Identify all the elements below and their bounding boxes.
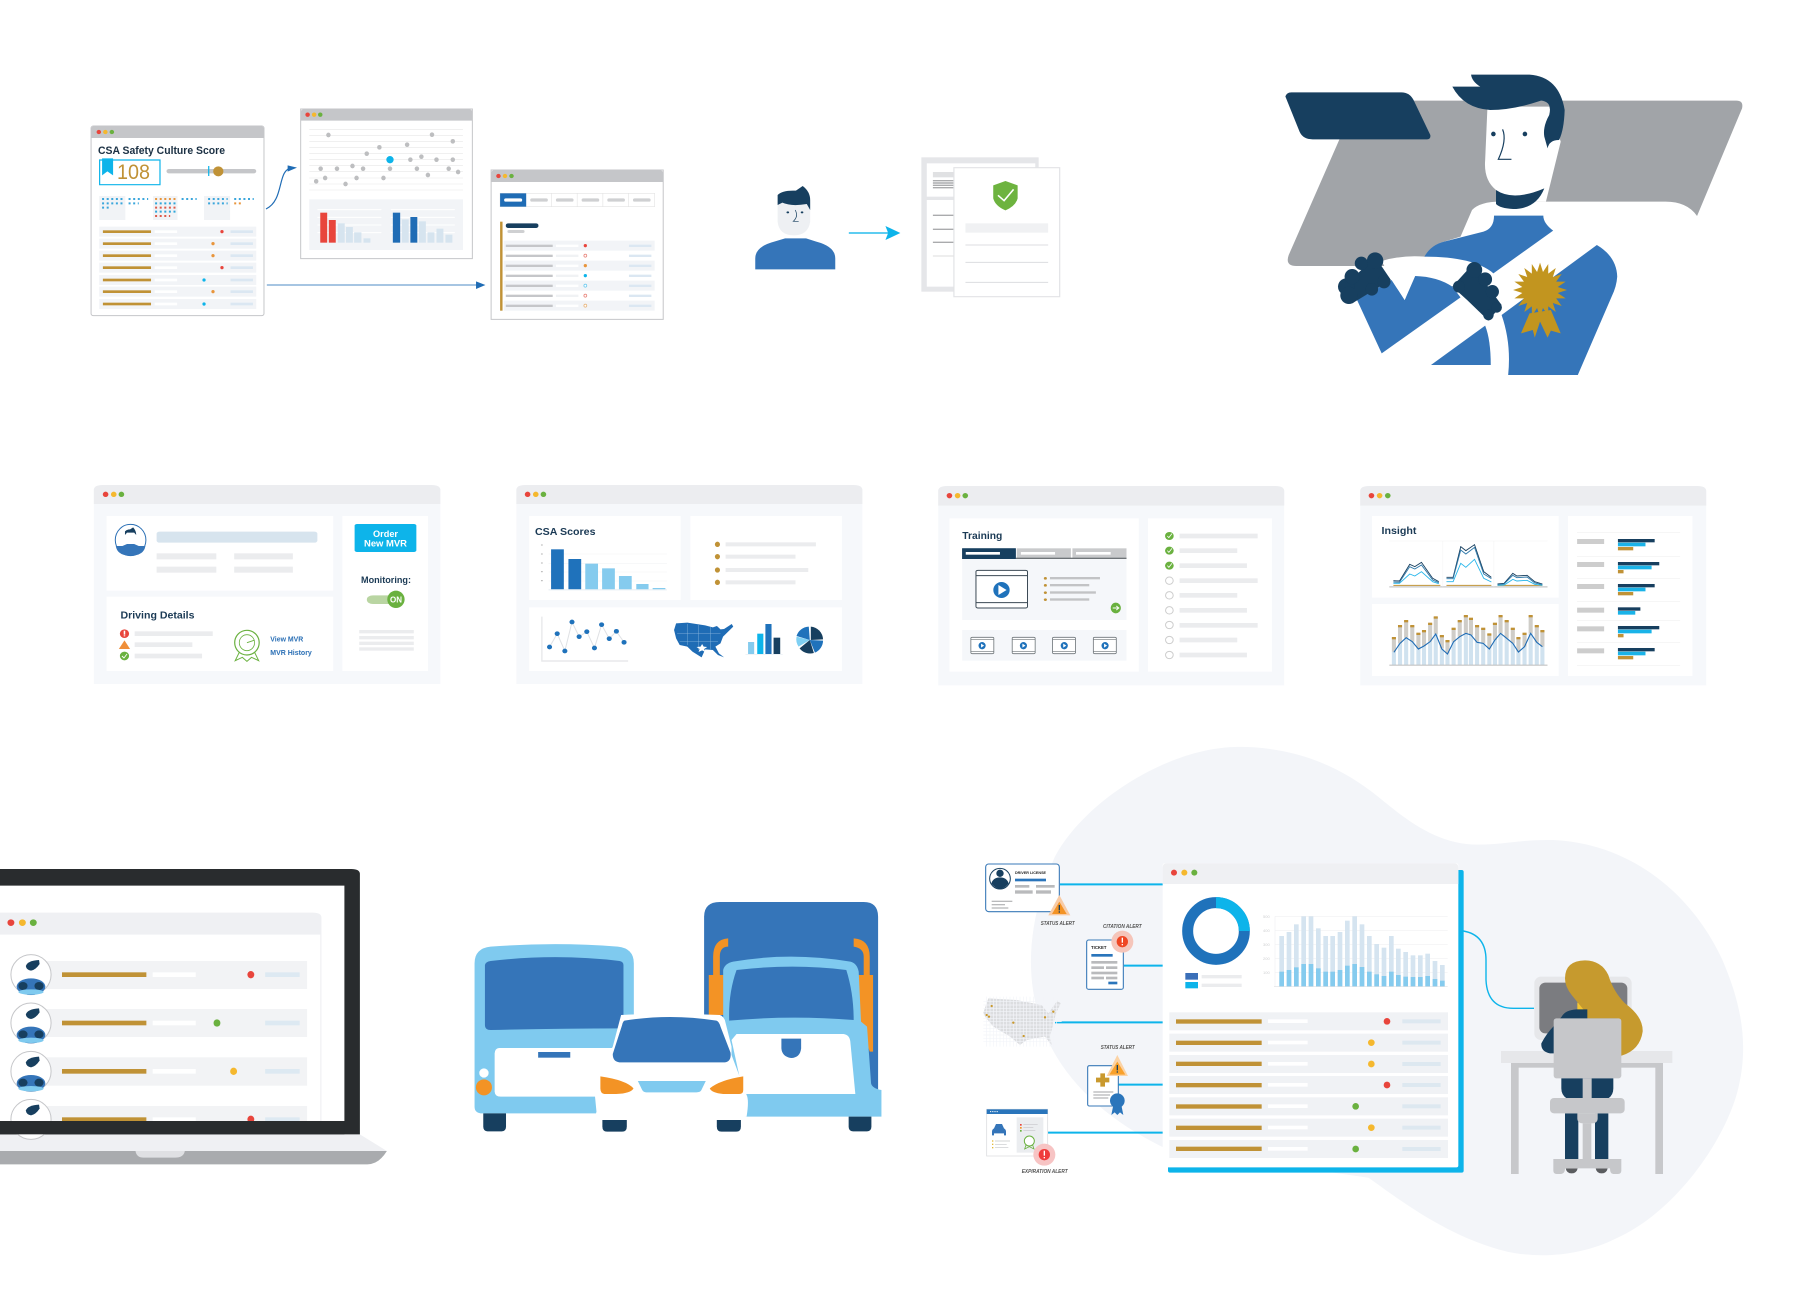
arrow: driver to document (849, 226, 900, 240)
chart axis labels: 500 (1263, 914, 1270, 919)
window: scatter and bars (301, 109, 472, 259)
label: status alert: STATUS ALERT (1041, 921, 1075, 927)
icon: driver portrait (755, 186, 835, 269)
window: CSA Safety Culture Score (91, 126, 264, 316)
illustration: fleet vehicles (475, 902, 881, 1132)
button label: Order New MVR: New MVR (364, 538, 407, 550)
panel: driver to verified document (755, 157, 1060, 297)
main dashboard window (1163, 863, 1464, 1173)
alert: citation ticket (1087, 924, 1142, 989)
window: table with tabs (491, 170, 663, 319)
button label: Order New MVR (364, 529, 407, 550)
laptop base (0, 1134, 387, 1164)
chart axis labels: 400 (1263, 928, 1270, 933)
box truck (704, 902, 881, 1131)
link: View MVR: View MVR (270, 634, 304, 644)
illustration: driver at the wheel with seat belt and medal (1285, 75, 1742, 375)
label: Monitoring: Monitoring: (361, 575, 411, 586)
gloves (1338, 252, 1502, 321)
laptop screen bezel (0, 869, 360, 1134)
ticket title: TICKET (1091, 945, 1107, 950)
car (595, 1014, 748, 1132)
chart axis labels: 100 (1263, 970, 1270, 975)
dashboard: CSA scores (516, 485, 862, 684)
alert: medical certificate (1088, 1045, 1135, 1115)
connector lines (1048, 884, 1163, 1133)
panel: CSA safety culture score flow (91, 109, 663, 319)
illustration: laptop with driver list (0, 869, 387, 1164)
sun visor (1285, 92, 1430, 139)
dashboard: insight (1360, 486, 1706, 685)
icon: documents with green shield (921, 157, 1060, 297)
dashboard: order MVR and driving details (94, 485, 440, 684)
label: status alert: STATUS ALERT (1101, 1045, 1135, 1051)
chart axis labels: 200 (1263, 956, 1270, 961)
chart axis labels: 300 (1263, 942, 1270, 947)
driver head (1452, 75, 1565, 209)
label: expiration alert: EXPIRATION ALERT (1022, 1169, 1068, 1175)
medal (1513, 263, 1567, 338)
background blob (1031, 747, 1743, 1255)
illustration: woman at desk (1463, 931, 1672, 1174)
link: MVR History: MVR History (270, 648, 313, 657)
panel: alerts feeding dashboard (983, 863, 1672, 1175)
steering wheel on gray (1382, 256, 1447, 300)
chart axis labels (1263, 914, 1270, 975)
toggle label: ON: ON (390, 596, 402, 604)
driver list window (0, 913, 344, 1139)
alert: driver license (986, 864, 1075, 927)
heading: CSA Scores: CSA Scores (535, 526, 596, 538)
label: citation alert: CITATION ALERT (1103, 924, 1142, 930)
arrow: curved to scatter window (266, 165, 297, 209)
bus (475, 944, 634, 1131)
heading: Training: Training (962, 530, 1002, 542)
windshield (1288, 101, 1742, 266)
alert: vehicle registration expiration (987, 1109, 1068, 1175)
license title: DRIVER LICENSE (1015, 871, 1047, 875)
heading: Insight: Insight (1382, 525, 1417, 537)
score number: 108 (117, 161, 150, 184)
heading: Driving Details: Driving Details (120, 610, 195, 622)
arrow: straight to table window (267, 281, 485, 289)
dashboard: training (938, 486, 1284, 685)
heading: CSA Safety Culture Score: CSA Safety Culture Score (98, 145, 225, 157)
dotted US map (983, 997, 1062, 1047)
button label: Order New MVR: Order (373, 529, 398, 540)
driver jacket (1357, 216, 1617, 375)
